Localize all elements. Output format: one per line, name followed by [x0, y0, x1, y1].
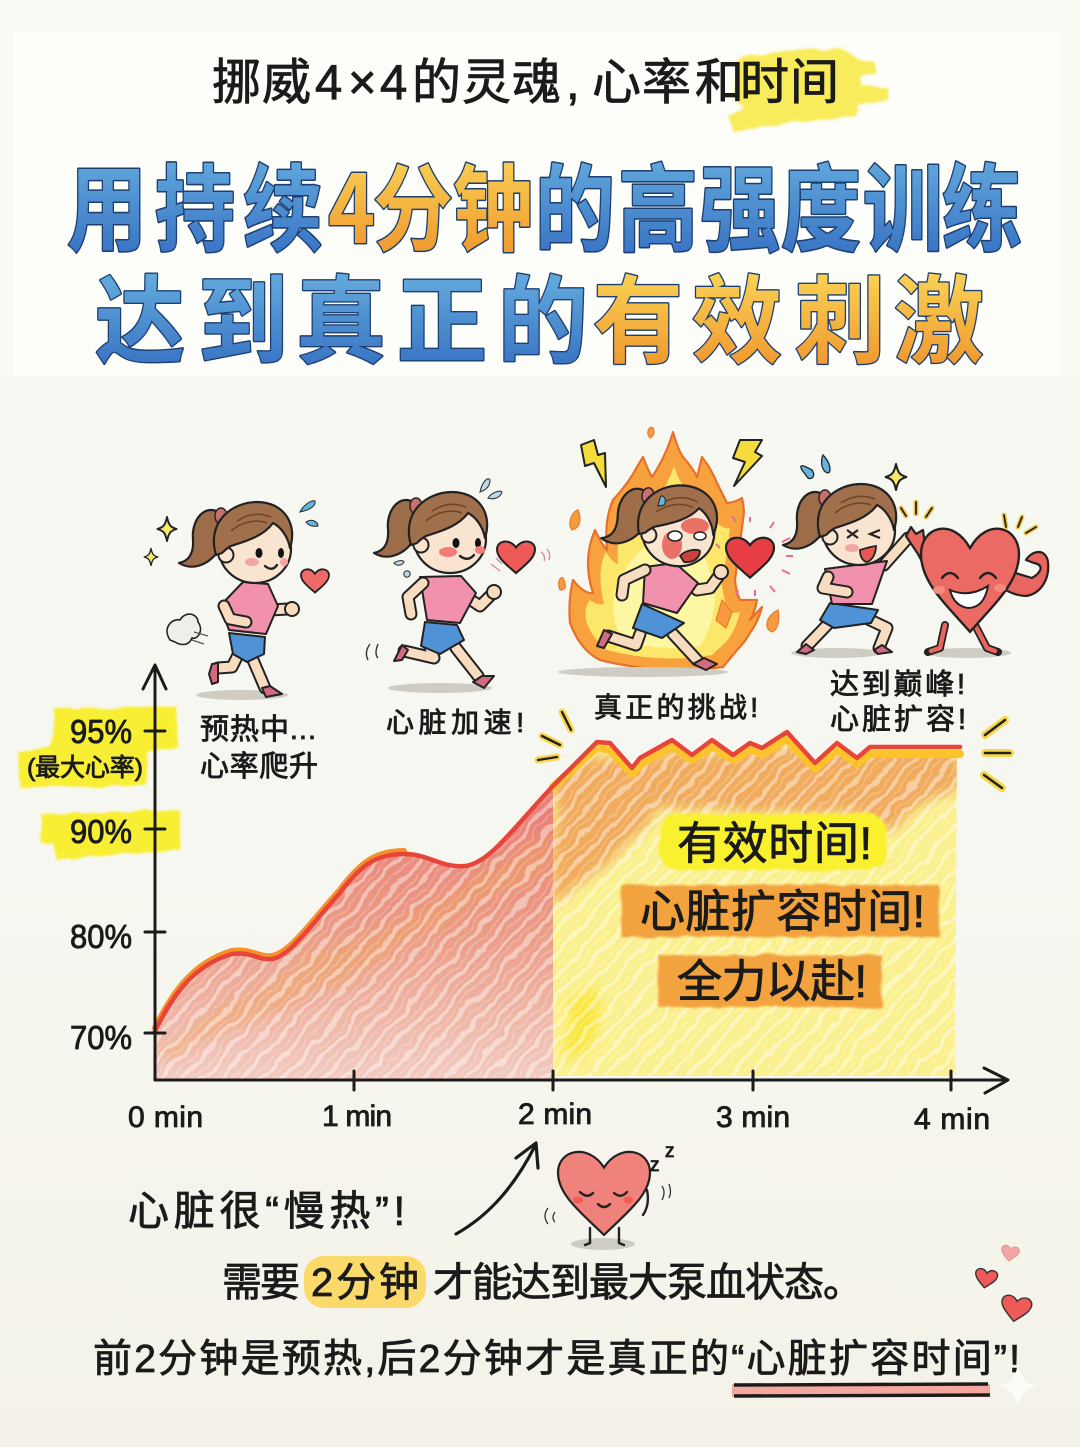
bottom text line 2: 前2分钟是预热,后2分钟才是真正的“心脏扩容时间”!: [93, 1338, 1020, 1381]
dust puff: [167, 614, 208, 644]
y axis highlights: [18, 706, 180, 860]
effective time area fill: [553, 744, 957, 1076]
x axis labels: 1 min: [322, 1100, 392, 1133]
sparkle and sweat: [801, 455, 906, 490]
heart rate curve: [155, 732, 960, 1031]
ground shadows: [791, 648, 1011, 658]
title line 1: 的高强度训练: [535, 135, 1022, 271]
shorts: [421, 622, 464, 654]
title line 2: 有效刺激: [593, 244, 984, 383]
label: reached peak: 达到巅峰!: [830, 668, 965, 701]
big heart face: [933, 573, 1006, 608]
heart with pulses: [491, 542, 550, 573]
laughing face: [845, 530, 880, 562]
arms: [270, 602, 299, 616]
y axis labels: 70%: [70, 1019, 132, 1056]
x axis labels: 3 min: [716, 1101, 790, 1134]
line 1 text: 才能达到最大泵血状态。: [433, 1261, 863, 1305]
label: reached peak: 心脏扩容!: [830, 703, 966, 736]
figure: real challenge girl in flames: [558, 427, 793, 677]
small heart: [301, 569, 329, 593]
raised arm: [884, 538, 908, 565]
subtitle: [212, 47, 888, 131]
sleepy heart shadow: [571, 1238, 635, 1250]
sweat drops and motion lines: [366, 479, 502, 660]
chart: [18, 665, 1010, 1136]
heart muscle arm: [1000, 552, 1048, 596]
ground shadow: [558, 667, 728, 677]
subtitle text: 挪威4×4的灵魂,心率和时间: [212, 56, 839, 110]
right peak sparks: [984, 720, 1010, 788]
shoes: [394, 645, 494, 688]
left peak sparks: [538, 712, 571, 760]
title line 1: 用持续: [67, 135, 323, 271]
y axis labels: (最大心率): [27, 754, 143, 782]
heart character legs: [928, 625, 998, 652]
figure: peak girl with heart high five: [783, 455, 1048, 658]
shoes: [209, 663, 282, 697]
decorative hearts: [973, 1245, 1033, 1324]
shorts: [820, 603, 878, 628]
figure: heart speeding up girl: [366, 479, 550, 693]
torso: [825, 561, 887, 604]
label: real challenge: 真正的挑战!: [594, 692, 758, 723]
axes: [143, 665, 1008, 1093]
x axis labels: 4 min: [914, 1103, 990, 1136]
ground shadow: [388, 683, 492, 693]
sparkle watermark: [1000, 1364, 1036, 1408]
x axis labels: 2 min: [518, 1098, 592, 1131]
label: heart speeding up: 心脏加速!: [386, 707, 524, 738]
motion lines: [545, 1184, 670, 1224]
head: [374, 492, 487, 573]
far arm: [697, 565, 728, 590]
title line 2: 达到真正的: [95, 244, 588, 383]
header inner paper: [14, 32, 1060, 376]
icon: sleepy heart: [545, 1141, 674, 1250]
sleepy face: [573, 1192, 633, 1207]
torso: [220, 582, 278, 634]
callout: heart expansion time: 心脏扩容时间!: [640, 886, 925, 937]
z letters: z: [665, 1141, 674, 1162]
z letters: [650, 1141, 674, 1176]
big heart body: [921, 529, 1019, 632]
warm-up area fill: [156, 790, 553, 1078]
y axis labels: 90%: [70, 813, 132, 850]
near arm: [408, 583, 423, 614]
head: [179, 502, 292, 583]
shorts: [229, 633, 265, 662]
label: warming up: [200, 713, 318, 783]
sparkles and sweat: [144, 501, 318, 566]
angry face: [658, 496, 709, 562]
y axis labels: [27, 713, 143, 1056]
legs: [807, 620, 887, 648]
face: [245, 548, 288, 569]
z letters: z: [650, 1155, 660, 1176]
shoes: [797, 644, 892, 654]
legs: [404, 648, 478, 676]
torso: [420, 576, 476, 623]
far arm: [468, 585, 501, 606]
bottom note: heart warms slowly: 心脏很“慢热”!: [128, 1188, 405, 1234]
flames: [559, 427, 779, 670]
line 1 text: 2分钟: [311, 1261, 419, 1305]
line 1 text: 需要: [222, 1261, 300, 1305]
x axis labels: [128, 1098, 990, 1136]
label: warming up: 预热中...: [200, 713, 316, 746]
face: [439, 538, 485, 559]
legs: [218, 655, 265, 688]
sleepy heart body: [558, 1152, 650, 1245]
callout: effective time: 有效时间!: [677, 818, 872, 869]
x axis labels: 0 min: [128, 1101, 203, 1134]
callout: all out: 全力以赴!: [677, 956, 867, 1007]
shoes: [597, 630, 717, 670]
label: reached peak: [830, 668, 966, 736]
label: warming up: 心率爬升: [200, 750, 318, 783]
figure: warming up girl: [144, 501, 329, 700]
ground shadow: [196, 690, 288, 700]
line 1 text: [222, 1261, 863, 1305]
legs: [608, 634, 697, 660]
heart high five arm: [906, 527, 930, 562]
header background: [0, 0, 1080, 376]
title line 1: 4分钟: [328, 135, 533, 271]
y axis labels: 80%: [70, 918, 132, 955]
near arm: [224, 606, 246, 622]
near arm: [823, 577, 847, 592]
shorts: [633, 604, 684, 638]
glowing heart: [716, 516, 793, 596]
head: [783, 484, 896, 565]
lightning bolts: [581, 440, 762, 487]
highlight: 2 minutes: [304, 1256, 426, 1308]
head: [599, 477, 720, 570]
near arm: [622, 570, 645, 595]
gold ticks: [901, 502, 1036, 533]
arrow: [456, 1143, 538, 1234]
y axis labels: 95%: [70, 713, 132, 750]
torso: [643, 563, 698, 613]
bottom text line 1: [222, 1256, 863, 1308]
underline: [732, 1384, 990, 1397]
subtitle yellow highlight: [728, 47, 888, 131]
